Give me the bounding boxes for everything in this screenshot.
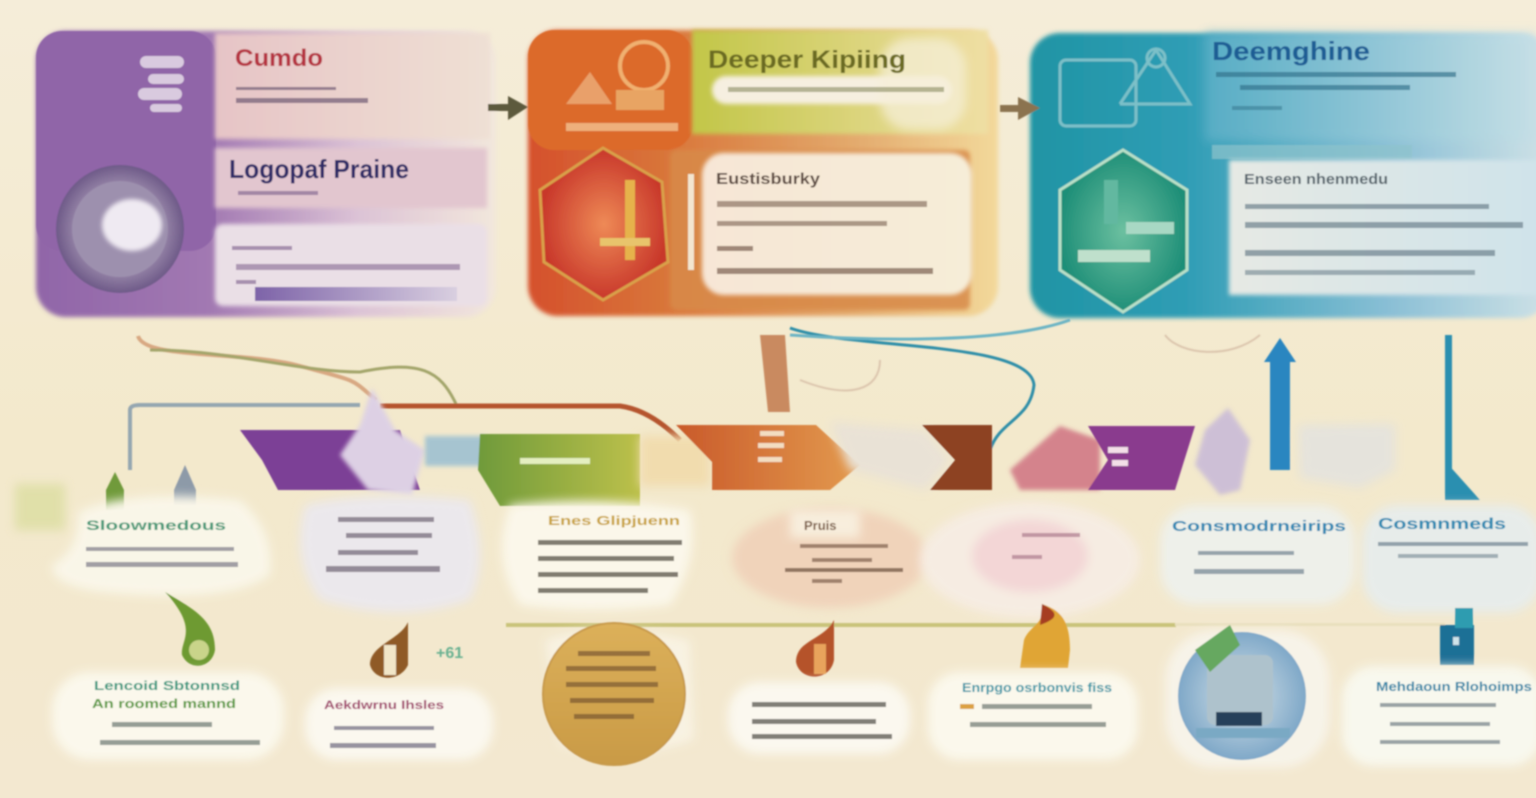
icon: sphere [56,165,184,293]
text: purple 2 [232,191,460,284]
arrow: purple to orange [488,96,528,120]
ribbon: green [478,434,640,506]
icon: gold drop [1020,604,1070,668]
heading: purple 1: Cumdo [235,45,323,72]
ribbon: purple 2 [1088,426,1195,490]
arrow: orange to teal [1000,97,1040,120]
icon: lilac flower 2 [1195,408,1250,495]
icon: red hexagon [540,148,668,300]
bubble: peach [732,508,928,608]
icon: green hexagon [1060,150,1187,312]
icon: green drop [106,472,124,510]
arrow: blue up 1 [1264,338,1296,470]
heading: Aekdwrnu Ihsles [324,698,444,712]
ribbon: brown [922,425,992,490]
heading: Cosmnmeds [1378,516,1506,533]
bubble: bottom 1 [52,672,284,760]
icon: orange drop [796,620,834,677]
ribbon: light grey [1298,424,1395,488]
heading: teal 2: Enseen nhenmedu [1244,171,1388,188]
ribbon: purple [240,430,420,490]
heading: Enrpgo osrbonvis fiss [962,680,1112,695]
mid row bubbles [52,496,1536,618]
bubble: yellow [502,501,692,610]
bubble: bottom 4 [928,672,1138,760]
heading: Lencoid Sbtonnsd [94,678,240,693]
bubble: bottom 5 [1342,666,1536,766]
icon: green leaf [165,592,215,666]
connectors [130,320,1260,470]
gold circle [543,623,694,765]
arrow: blue line 2 [1445,335,1480,500]
panel: purple top left [36,31,496,317]
ribbon: orange [676,425,860,490]
icon: teal bookmark [1440,608,1474,665]
heading: purple 2: Logopaf Praine [229,154,409,184]
heading: Enes Glipjuenn [548,513,680,528]
icon: stacked layers [138,56,184,112]
ribbon: pale [640,436,710,486]
text: orange 2 [717,201,933,274]
label: green mini: +61 [436,645,463,662]
panel: orange top middle [528,30,998,316]
icon: network outline [1060,49,1190,126]
text: purple 1 [236,87,368,103]
bar [255,287,457,301]
ribbon: pink [1010,426,1100,490]
text: teal 2 [1245,204,1523,275]
divider line [506,623,1176,627]
heading: orange 1: Deeper Kipiing [708,46,906,74]
bubble: lilac [300,496,480,612]
heading: teal 1: Deemghine [1212,36,1370,66]
ribbon timeline [15,388,1395,530]
ribbon: pale grey [830,422,950,490]
heading: Pruis [804,518,837,533]
text: orange 1 [728,87,944,92]
icon: brown drop [370,622,408,678]
bubble: blue 2 [1362,505,1536,613]
text: teal 1 [1216,72,1456,110]
bottom row bubbles [52,666,1536,766]
bubble: bottom 3 [728,682,910,754]
bubble: pink [920,502,1140,618]
panel: teal top right [1030,33,1536,318]
heading: Consmodrneirips [1172,518,1346,535]
bubble: bottom 2 [305,688,493,760]
blue sphere with jar [1165,625,1330,768]
text: gold circle [566,651,658,719]
bubble: bottom 1: An roomed mannd [92,696,236,711]
icon: lilac flower 1 [340,388,425,495]
bubble: blue 1 [1160,505,1355,605]
icon: grey drop [174,465,196,505]
arrow: brown vertical [760,335,790,412]
heading: Mehdaoun Rlohoimps [1376,679,1532,694]
heading: Sloowmedous [86,517,226,533]
bubble: green label [52,496,271,596]
icon: house and bulb [566,42,678,131]
connector icons [165,592,1474,678]
heading: orange 2: Eustisburky [716,171,820,188]
